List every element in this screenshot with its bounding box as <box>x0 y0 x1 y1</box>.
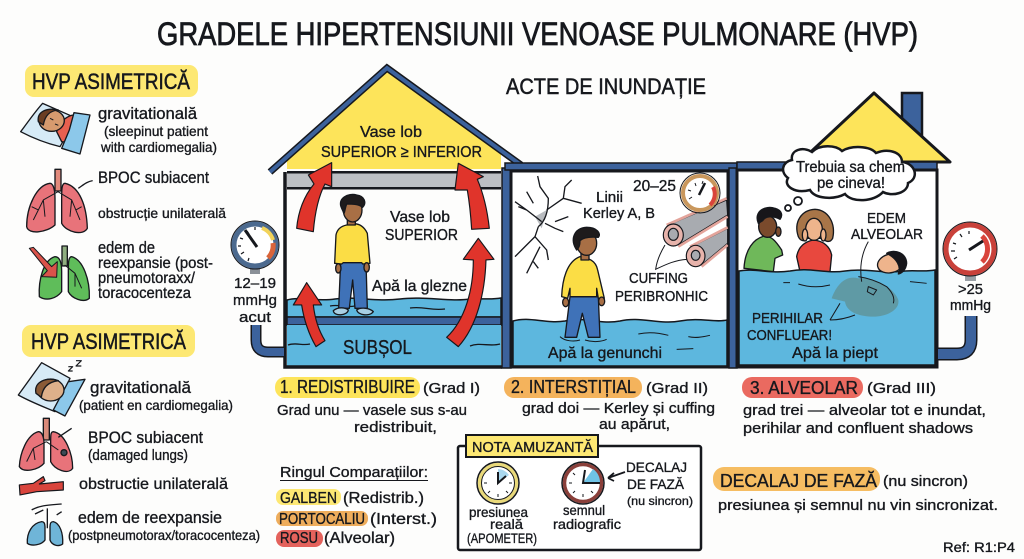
grade 2 block <box>504 377 715 433</box>
text: edem de reexpansie 1: pneumotoraxx/ <box>98 270 196 287</box>
text: edem alveolar <box>851 210 923 243</box>
grade 1 block: Grad unu — vasele sus s-au <box>277 402 467 419</box>
heading: acte de inundație: ACTE DE INUNDAȚIE <box>506 74 706 99</box>
icon: damaged lungs <box>19 418 73 471</box>
text: cuffing peribronhic: PERIBRONHIC <box>615 288 708 305</box>
text: gravitațională 1: (sleepinut patient <box>104 123 208 139</box>
gauge: over 25 mmHg: mmHg <box>950 297 991 314</box>
text: vase lob superior: Vase lob <box>390 209 450 226</box>
text: apă la piept: Apă la piept <box>792 345 879 362</box>
text: edem de reexpansie 1: edem de <box>98 238 155 257</box>
text: linii kerley <box>583 189 655 222</box>
legend: ringul comparațiilor <box>276 464 437 547</box>
legend: ringul comparațiilor: (Alveolar) <box>324 530 395 547</box>
text block: decalaj de fază: presiunea și semnul nu vin sincronizat. <box>718 497 998 514</box>
title: GRADELE HIPERTENSIUNII VENOASE PULMONARE (HVP) <box>157 16 918 52</box>
text: edem de reexpansie 1: toracocenteza <box>98 285 191 302</box>
grade 2 block: 2. INTERSTIȚIAL <box>511 377 636 397</box>
grade 1 block: (Grad I) <box>423 380 480 397</box>
text: 20-25: 20–25 <box>633 178 676 195</box>
grade 3 block: (Grad III) <box>867 380 936 397</box>
gauge: 12-19 mmHg: 12–19 <box>234 275 276 292</box>
heading: HVP asimetrică 1 <box>25 65 198 97</box>
top blue band <box>737 162 937 170</box>
text: BPOC subiacent 2: BPOC subiacent <box>88 428 203 447</box>
icon: obstructed vessel <box>19 477 63 495</box>
callout: thought bubble <box>783 146 915 211</box>
legend: ringul comparațiilor: (Redistrib.) <box>343 490 424 507</box>
roof: house 1 <box>270 68 521 190</box>
text: BPOC subiacent 2 <box>88 428 203 464</box>
text: vase lob superior ≥ inferior: SUPERIOR ≥ INFERIOR <box>321 144 482 161</box>
text: gravitațională 1: gravitatională <box>98 104 198 123</box>
text: BPOC subiacent 1: obstrucție unilaterală <box>98 205 226 221</box>
text: semnul radiografic <box>553 502 621 532</box>
text: BPOC subiacent 2: (damaged lungs) <box>88 447 188 464</box>
legend: ringul comparațiilor: ROSU <box>280 530 318 547</box>
text: apă la genunchi: Apă la genunchi <box>548 345 662 362</box>
water: chest <box>739 270 935 365</box>
text: vase lob superior <box>385 209 458 244</box>
text: edem de reexpansie 2: edem de reexpansie <box>78 508 222 527</box>
house 1 walls <box>285 172 502 367</box>
arrow: bottom left <box>293 283 325 347</box>
arrow: to clock <box>608 472 625 481</box>
legend: ringul comparațiilor: PORTOCALIU <box>279 511 365 528</box>
gauge: over 25 mmHg <box>938 222 997 354</box>
text block: decalaj de fază: DECALAJ DE FAZĂ <box>720 471 877 491</box>
pipe left <box>256 325 284 352</box>
gauge: over 25 mmHg: >25 <box>958 281 983 298</box>
gauge: 20-25 dial <box>680 173 720 213</box>
gauge: 12-19 mmHg <box>231 221 284 352</box>
icon: sleeping patient <box>21 103 90 154</box>
text: vase lob superior ≥ inferior: Vase lob <box>360 124 422 141</box>
text: gravitațională 1: with cardiomegalia) <box>100 139 217 155</box>
icon: clock radiographic sign <box>562 462 604 504</box>
text: edem de reexpansie 1: reexpansie (post- <box>98 255 213 272</box>
text: gravitațională 2: gravitatională <box>90 378 192 397</box>
text: perihilar confluear: CONFLUEAR! <box>747 327 832 344</box>
panel 2 frame <box>511 171 728 367</box>
text: vase lob superior: SUPERIOR <box>385 227 458 244</box>
gauge: 12-19 mmHg: acut <box>239 309 272 326</box>
text: apă la glezne: Apă la glezne <box>372 278 467 295</box>
column between panels <box>502 168 511 368</box>
text: BPOC subiacent 1: BPOC subiacent <box>98 168 209 187</box>
heading: HVP asimetrică 2: HVP ASIMETRICĂ <box>31 329 186 354</box>
text: subsol: SUBȘOL <box>343 337 412 359</box>
column between panels 2 and 3 <box>729 168 737 368</box>
person standing ankle deep <box>333 194 373 315</box>
drowning person with perihilar shadow <box>783 242 927 320</box>
icon: green lungs with arrow <box>29 246 89 300</box>
legend: ringul comparațiilor: Ringul Comparațiilor: <box>280 464 428 481</box>
grade 2 block: grad doi — Kerley și cuffing <box>522 400 715 417</box>
callout: thought bubble: Trebuia sa chem <box>796 159 905 176</box>
legend: ringul comparațiilor: (Interst.) <box>370 511 437 528</box>
text: cuffing peribronhic: CUFFING <box>629 270 688 287</box>
pipe right <box>938 316 971 354</box>
arrow: bottom right <box>447 238 494 347</box>
panel: house cutaway 1 redistribuire <box>270 68 521 368</box>
text: decalaj de fază note: (nu sincron) <box>627 494 693 508</box>
icon: blue lungs <box>27 504 63 546</box>
grade 2 block: (Grad II) <box>646 380 708 397</box>
text: presiunea reală: presiunea <box>469 504 528 520</box>
panel: house cutaway 3 alveolar <box>737 93 950 367</box>
text: presiunea reală <box>467 504 537 546</box>
legend: ringul comparațiilor: GALBEN <box>280 490 337 507</box>
text: edem alveolar: ALVEOLAR <box>851 226 923 243</box>
text: cuffing peribronhic <box>615 270 708 305</box>
bronchi: cuffing tubes <box>656 198 728 269</box>
grade 3 block: grad trei — alveolar tot e inundat, <box>743 402 986 419</box>
text: semnul radiografic: radiografic <box>553 516 621 532</box>
panel: nota amuzantă <box>458 435 701 550</box>
icon: clock real pressure <box>477 462 519 504</box>
text: linii kerley: Kerley A, B <box>583 205 655 222</box>
text block: decalaj de fază <box>713 467 998 514</box>
text: vase lob superior ≥ inferior <box>321 124 482 161</box>
top blue band <box>505 163 737 170</box>
arrow: top left <box>297 163 332 232</box>
roof: house 3 <box>800 93 950 162</box>
text: edem de reexpansie 2: (postpneumotorax/toracocenteza) <box>68 527 260 543</box>
text: obstrucție unilaterală 2: obstructie unilaterală <box>79 476 228 493</box>
text: gravitațională 2: (patient en cardiomegalia) <box>79 397 233 413</box>
text: BPOC subiacent 1 <box>98 168 226 221</box>
text: perihilar confluear <box>747 310 832 344</box>
text: semnul radiografic: semnul <box>563 502 605 518</box>
text: perihilar confluear: PERIHILAR <box>752 310 823 327</box>
panel: house cutaway 2 interstițial <box>505 163 737 367</box>
water: knee <box>513 319 727 366</box>
text: decalaj de fază note <box>626 459 693 508</box>
people: worried onlookers <box>744 207 833 272</box>
icon: sleeping patient with zzz <box>18 361 85 416</box>
text: gravitațională 2 <box>79 378 233 413</box>
grade 3 block: perihilar and confluent shadows <box>743 420 973 437</box>
text: edem alveolar: EDEM <box>867 210 906 227</box>
gauge: 12-19 mmHg: mmHg <box>233 292 277 309</box>
text: linii kerley: Linii <box>596 189 623 206</box>
water: ankle and basement <box>287 298 501 366</box>
text: decalaj de fază note: DE FAZĂ <box>627 476 685 492</box>
callout: thought bubble: pe cineva! <box>817 175 885 192</box>
grade 1 block <box>275 377 480 436</box>
heading: HVP asimetrică 2 <box>22 325 195 357</box>
text: decalaj de fază note: DECALAJ <box>626 459 687 475</box>
text: edem de reexpansie 1 <box>98 238 213 302</box>
grade 3 block: 3. ALVEOLAR <box>750 378 858 398</box>
grade 3 block <box>742 377 986 437</box>
grade 2 block: au apărut, <box>599 416 670 433</box>
arrow: top right <box>455 163 489 229</box>
panel 3 frame <box>737 170 937 367</box>
grade 1 block: redistribuit, <box>354 419 437 436</box>
icon: red lungs <box>27 169 93 233</box>
reference: Ref: R1:P4 <box>943 539 1015 555</box>
panel: left column top <box>21 65 226 302</box>
text: presiunea reală: (APOMETER) <box>467 530 537 546</box>
person standing knee deep <box>560 227 710 349</box>
text block: decalaj de fază: (nu sincron) <box>883 473 968 490</box>
text: presiunea reală: reală <box>490 516 523 532</box>
cracks: kerley lines <box>515 176 582 273</box>
red arrows: redistribution <box>293 163 494 347</box>
heading: HVP asimetrică 1: HVP ASIMETRICĂ <box>32 69 190 94</box>
panel: left column bottom <box>18 325 260 546</box>
grade 1 block: 1. REDISTRIBUIRE <box>280 377 415 397</box>
text: edem de reexpansie 2 <box>68 508 260 543</box>
nota label: NOTA AMUZANTĂ <box>472 439 593 456</box>
chimney <box>902 93 922 138</box>
text: gravitațională 1 <box>98 104 217 155</box>
